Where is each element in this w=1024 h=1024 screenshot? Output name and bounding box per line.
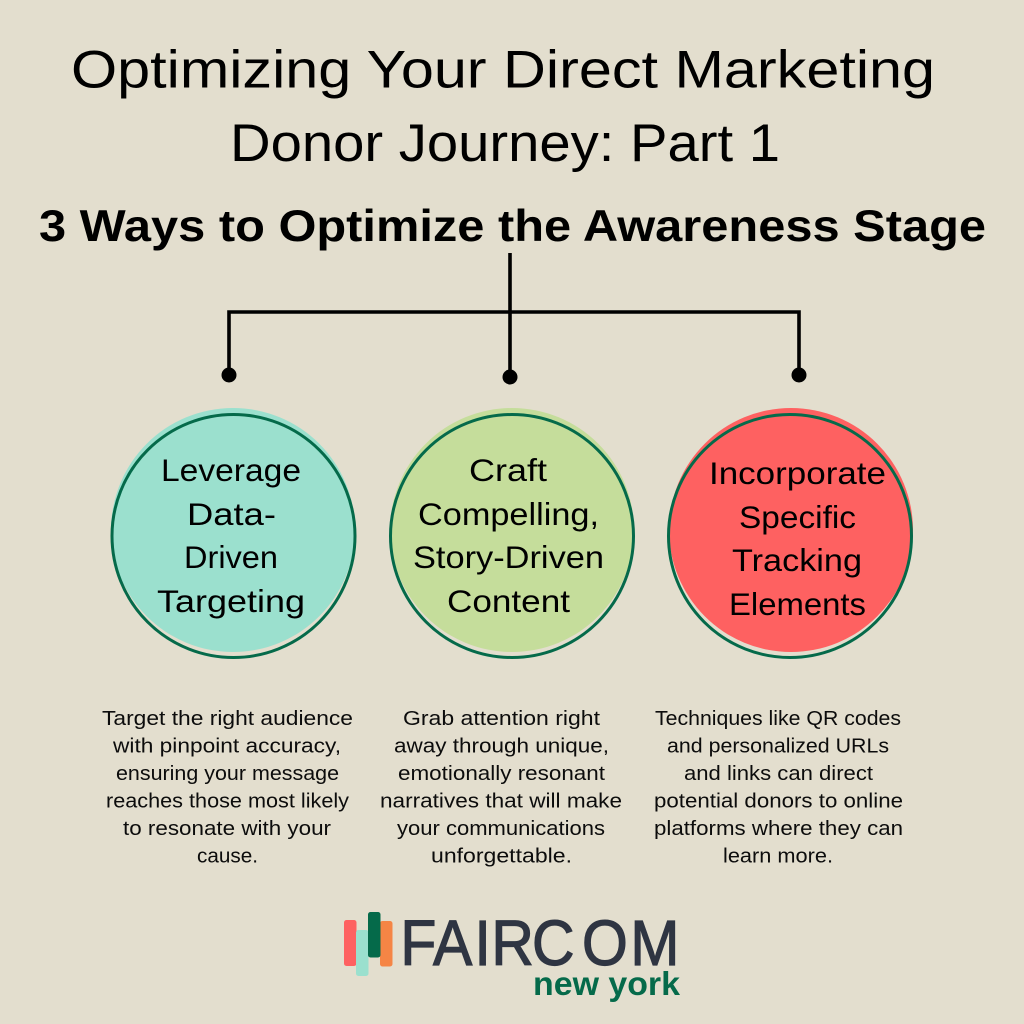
panel: craft compelling content circle xyxy=(390,408,634,658)
text block: tracking description: platforms where they can xyxy=(654,818,903,840)
text block: content description: narratives that will make xyxy=(380,790,622,812)
panel: leverage data-driven targeting circle xyxy=(111,408,355,658)
text block: targeting description: Target the right audience xyxy=(102,708,353,730)
panel: incorporate tracking elements circle xyxy=(668,408,913,658)
text block: content description xyxy=(380,708,622,868)
panel: leverage data-driven targeting circle: Driven xyxy=(184,539,278,575)
text block: targeting description xyxy=(102,708,353,868)
title: Donor Journey: Part 1 xyxy=(230,114,780,173)
text block: content description: emotionally resonant xyxy=(398,763,605,785)
connector tree with three branches xyxy=(222,253,806,384)
panel: incorporate tracking elements circle: Elements xyxy=(729,586,866,622)
panel: incorporate tracking elements circle: Incorporate xyxy=(709,455,886,491)
wordmark: FAIRCOM xyxy=(400,908,679,980)
panel: craft compelling content circle: Story-Driven xyxy=(413,539,604,575)
text block: targeting description: with pinpoint accuracy, xyxy=(112,736,341,758)
panel: incorporate tracking elements circle: Tracking xyxy=(732,542,862,578)
title: Optimizing Your Direct Marketing xyxy=(71,40,935,100)
text block: targeting description: to resonate with your xyxy=(123,818,331,840)
panel: leverage data-driven targeting circle: Leverage xyxy=(161,452,301,488)
logo: Faircom New York xyxy=(344,908,681,1002)
text block: targeting description: ensuring your message xyxy=(116,763,339,785)
panel: leverage data-driven targeting circle: Targeting xyxy=(157,583,305,619)
text block: tracking description: and links can direct xyxy=(684,763,873,785)
text block: content description: your communications xyxy=(397,818,605,840)
panel: craft compelling content circle: Compelling, xyxy=(418,496,599,532)
text block: targeting description: cause. xyxy=(197,846,258,868)
panel: craft compelling content circle: Content xyxy=(447,583,570,619)
subtitle: 3 Ways to Optimize the Awareness Stage xyxy=(39,202,986,251)
panel: incorporate tracking elements circle: Specific xyxy=(739,499,856,535)
text block: tracking description: learn more. xyxy=(723,846,833,868)
text block: content description: Grab attention right xyxy=(403,708,601,730)
text block: content description: away through unique, xyxy=(394,736,609,758)
text block: tracking description xyxy=(654,708,903,868)
text block: targeting description: reaches those most likely xyxy=(106,790,349,812)
panel: craft compelling content circle: Craft xyxy=(469,452,547,488)
text block: tracking description: and personalized URLs xyxy=(667,736,889,758)
tagline: new york xyxy=(533,965,681,1002)
title xyxy=(71,40,935,173)
panel: leverage data-driven targeting circle: Data- xyxy=(187,496,276,532)
text block: tracking description: potential donors to online xyxy=(654,790,903,812)
text block: content description: unforgettable. xyxy=(431,846,572,868)
text block: tracking description: Techniques like QR codes xyxy=(655,708,901,730)
icon: logo bars xyxy=(344,912,392,976)
